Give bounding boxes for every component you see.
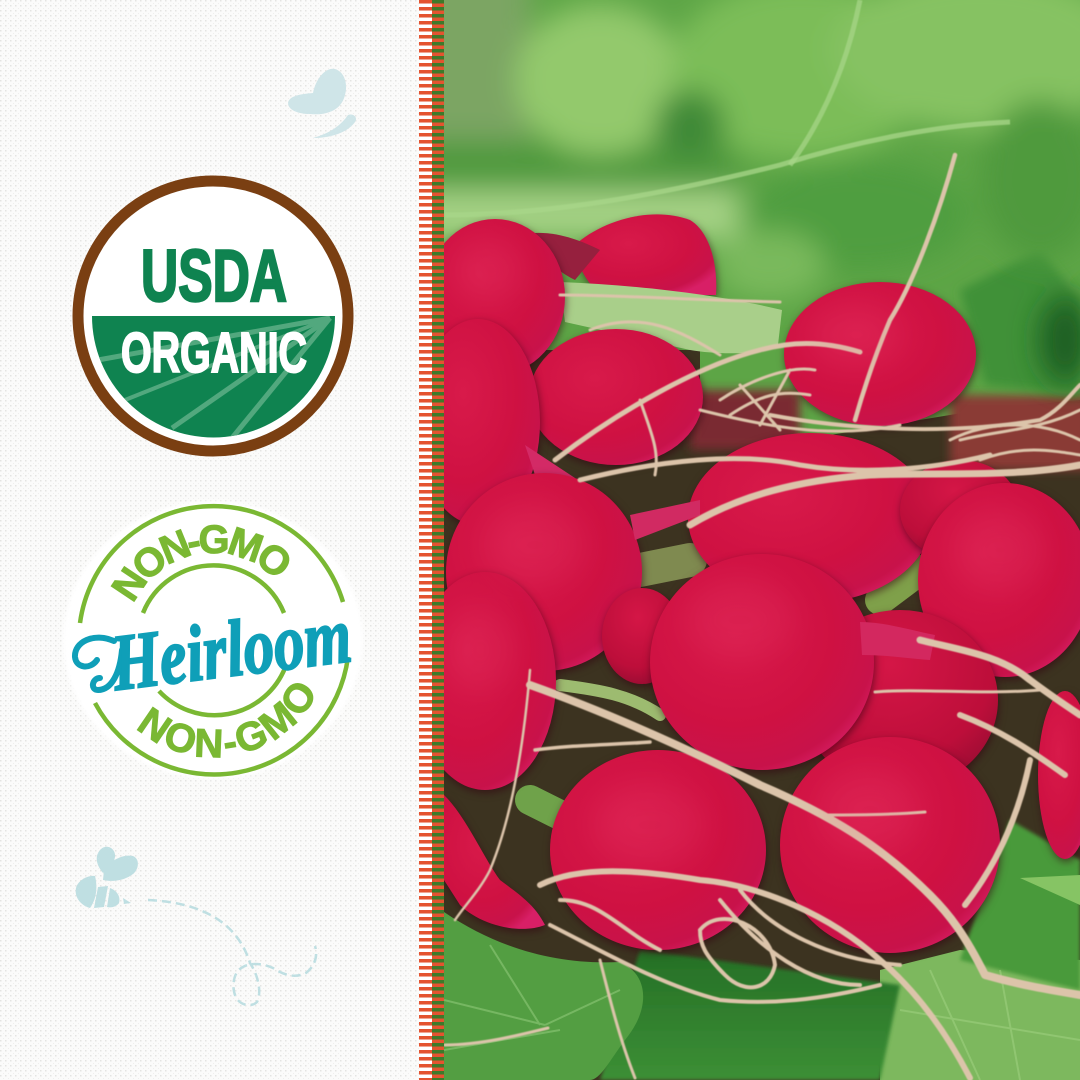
background foliage — [400, 0, 1080, 470]
badge: Non-GMO Heirloom: Heirloom — [106, 591, 356, 708]
linen background panel — [0, 0, 420, 1080]
icon: bee with dashed flight path — [76, 847, 316, 1005]
radish bulbs — [414, 214, 1080, 953]
highlights on radishes — [814, 318, 918, 850]
green stems between radishes — [530, 560, 920, 820]
badge: USDA Organic: ORGANIC — [121, 321, 307, 385]
decorative striped border — [419, 0, 444, 1080]
badge: Non-GMO Heirloom: NON-GMO — [110, 524, 290, 602]
badge: USDA Organic: USDA — [141, 236, 287, 317]
badge: USDA Organic — [78, 181, 348, 451]
badge: Non-GMO Heirloom — [63, 500, 362, 779]
foreground leaves at the bottom — [444, 820, 1080, 1080]
badge: Non-GMO Heirloom: NON-GMO — [136, 683, 314, 758]
icon: butterfly — [288, 69, 356, 138]
radish roots — [445, 155, 1080, 1078]
photo: radish bunch on leaves — [400, 0, 1080, 1080]
